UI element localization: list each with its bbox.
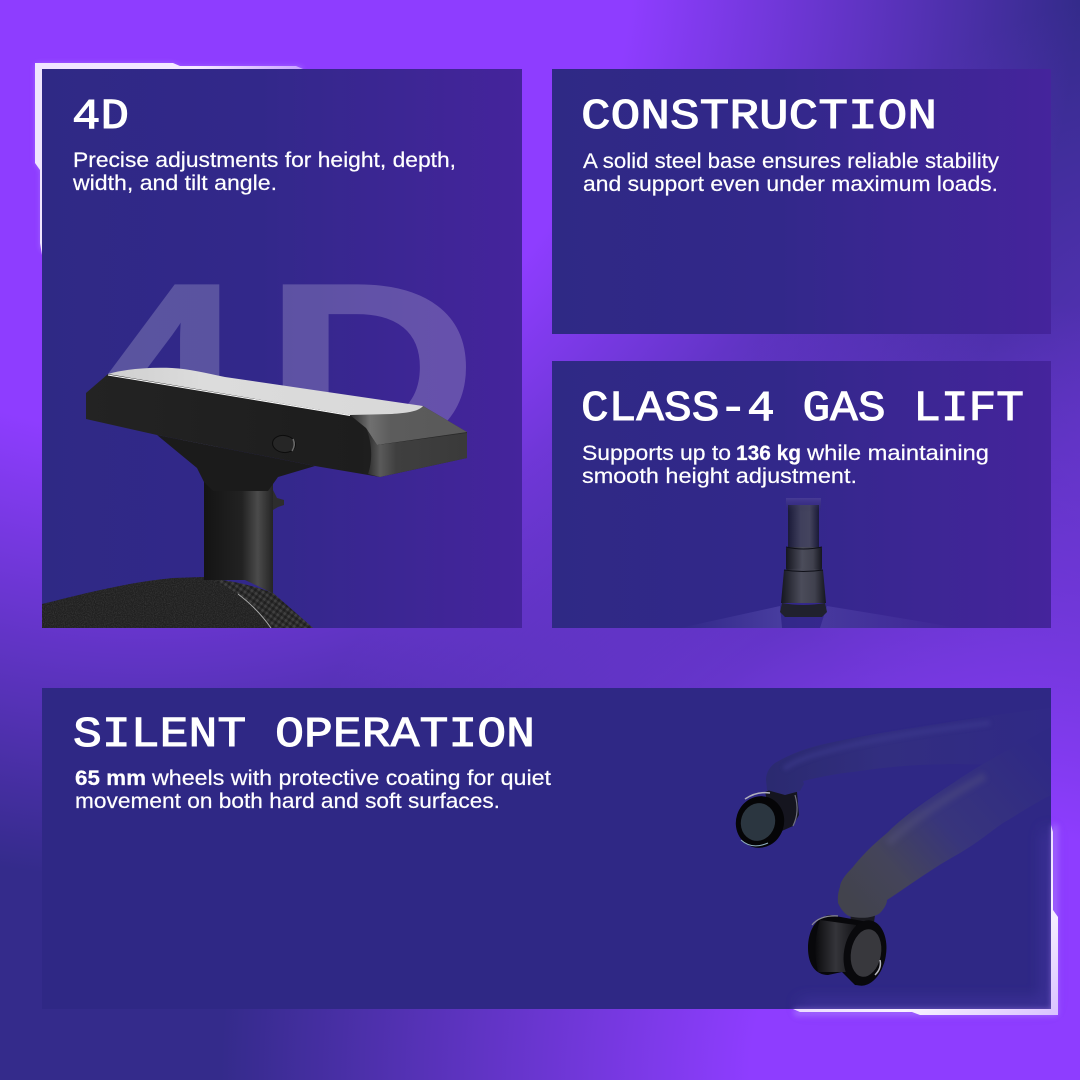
heading: gas lift: CLASS-4 GAS LIFT bbox=[581, 384, 1024, 433]
heading: 4D: 4D bbox=[72, 92, 129, 141]
seat cushion bbox=[42, 577, 313, 628]
description: 4D: Precise adjustments for height, depth, bbox=[73, 149, 456, 172]
description: gas lift: smooth height adjustment. bbox=[582, 465, 857, 488]
front caster bbox=[808, 915, 886, 986]
illustration: armrest bbox=[42, 368, 467, 628]
description: silent operation bbox=[75, 767, 551, 813]
front arm bbox=[838, 771, 1007, 918]
description: gas lift: while maintaining bbox=[806, 442, 989, 465]
watermark: 4D: 4 bbox=[92, 234, 246, 502]
panel: silent operation bbox=[42, 688, 1051, 1009]
heading: silent operation: SILENT OPERATION bbox=[73, 710, 535, 759]
arm pad bbox=[86, 368, 467, 477]
watermark: 4D: D bbox=[265, 234, 476, 502]
description: silent operation: wheels with protective coating for quiet bbox=[151, 767, 551, 790]
post bbox=[204, 478, 284, 593]
illustration: caster arms bbox=[736, 722, 1007, 986]
description: construction: A solid steel base ensures reliable stability bbox=[583, 150, 1000, 173]
neon corner: bottom right bbox=[793, 825, 1058, 1016]
illustration: gas lift bbox=[718, 498, 895, 628]
neon corner: top left bbox=[35, 63, 303, 255]
description: gas lift: 136 kg bbox=[736, 442, 801, 465]
rear caster bbox=[736, 790, 799, 848]
collar bbox=[157, 435, 315, 491]
description: gas lift: Supports up to bbox=[582, 442, 731, 465]
watermark: 4D bbox=[108, 284, 466, 447]
panel: construction bbox=[552, 69, 1051, 334]
description: silent operation: 65 mm bbox=[75, 767, 146, 790]
description: silent operation: movement on both hard and soft surfaces. bbox=[75, 790, 500, 813]
description: gas lift bbox=[582, 442, 989, 488]
description: 4D bbox=[72, 149, 456, 195]
description: construction: and support even under maximum loads. bbox=[583, 173, 998, 196]
panel edge glow bbox=[800, 830, 1048, 1005]
heading: construction: CONSTRUCTION bbox=[581, 92, 937, 141]
panel: 4D armrest bbox=[42, 69, 522, 628]
panel: gas lift bbox=[552, 361, 1051, 628]
description: 4D: width, and tilt angle. bbox=[72, 172, 277, 195]
rear arm bbox=[766, 722, 988, 795]
description: construction bbox=[583, 150, 1000, 196]
